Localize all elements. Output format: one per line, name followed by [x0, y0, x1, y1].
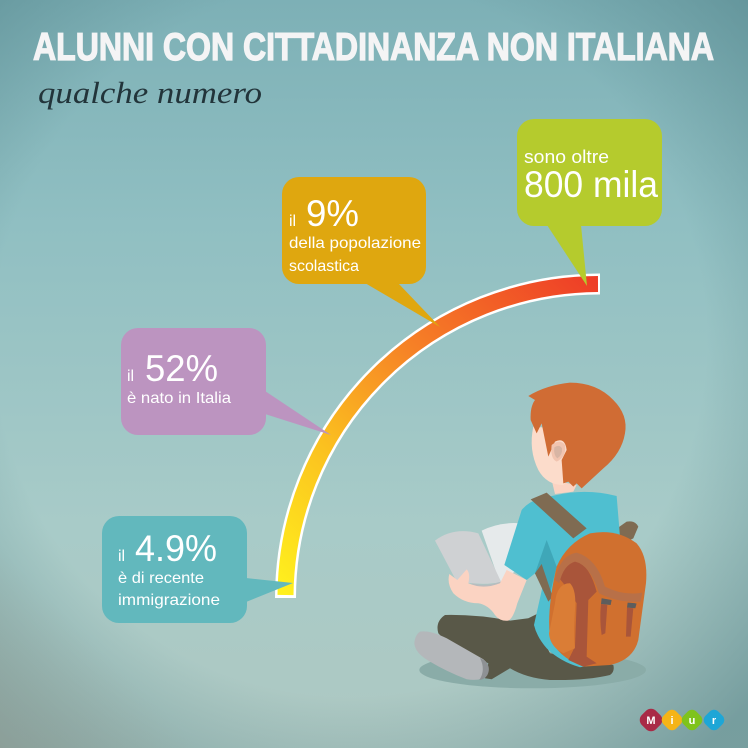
callout: 52%: il: [127, 368, 134, 385]
callout: 52%: 52%: [145, 348, 218, 389]
callout: 4.9%: [102, 516, 293, 623]
logo: MIUR: M: [646, 715, 656, 727]
logo: MIUR: r: [712, 715, 717, 727]
callout: 9%: 9%: [306, 193, 359, 234]
illustration: boy reading with backpack: [414, 383, 646, 688]
callout: 4.9%: immigrazione: [118, 592, 220, 609]
callout: 800 mila: 800 mila: [524, 164, 658, 205]
neck: [552, 480, 577, 494]
callout: 52%: [121, 328, 331, 435]
shoe: [414, 631, 488, 680]
t-shirt: [504, 492, 620, 667]
arm: [449, 569, 527, 621]
ground shadow: [419, 652, 646, 688]
callout: 800 mila: [517, 119, 662, 286]
curved progress arc: [286, 284, 600, 598]
backpack: [549, 532, 646, 667]
callout: 9%: [282, 177, 440, 327]
callout: 9%: scolastica: [289, 258, 359, 275]
logo: MIUR: u: [689, 715, 695, 727]
callout: 9%: della popolazione: [289, 235, 421, 252]
callout: 800 mila: sono oltre: [524, 147, 609, 167]
callout: 4.9%: è di recente: [118, 570, 204, 587]
callout: 4.9%: 4.9%: [135, 528, 217, 569]
callout: 9%: il: [289, 213, 296, 230]
logo: MIUR: i: [670, 715, 674, 727]
trousers: [437, 610, 614, 680]
ear: [551, 442, 565, 462]
book: [435, 523, 520, 592]
callout: 4.9%: il: [118, 548, 125, 565]
callout: 52%: è nato in Italia: [127, 390, 231, 407]
logo: MIUR: [637, 706, 727, 734]
head: [532, 427, 577, 485]
far strap: [610, 521, 638, 545]
main strap: [531, 493, 587, 538]
subtitle: qualche numero: [38, 75, 262, 110]
hair: [528, 383, 626, 488]
